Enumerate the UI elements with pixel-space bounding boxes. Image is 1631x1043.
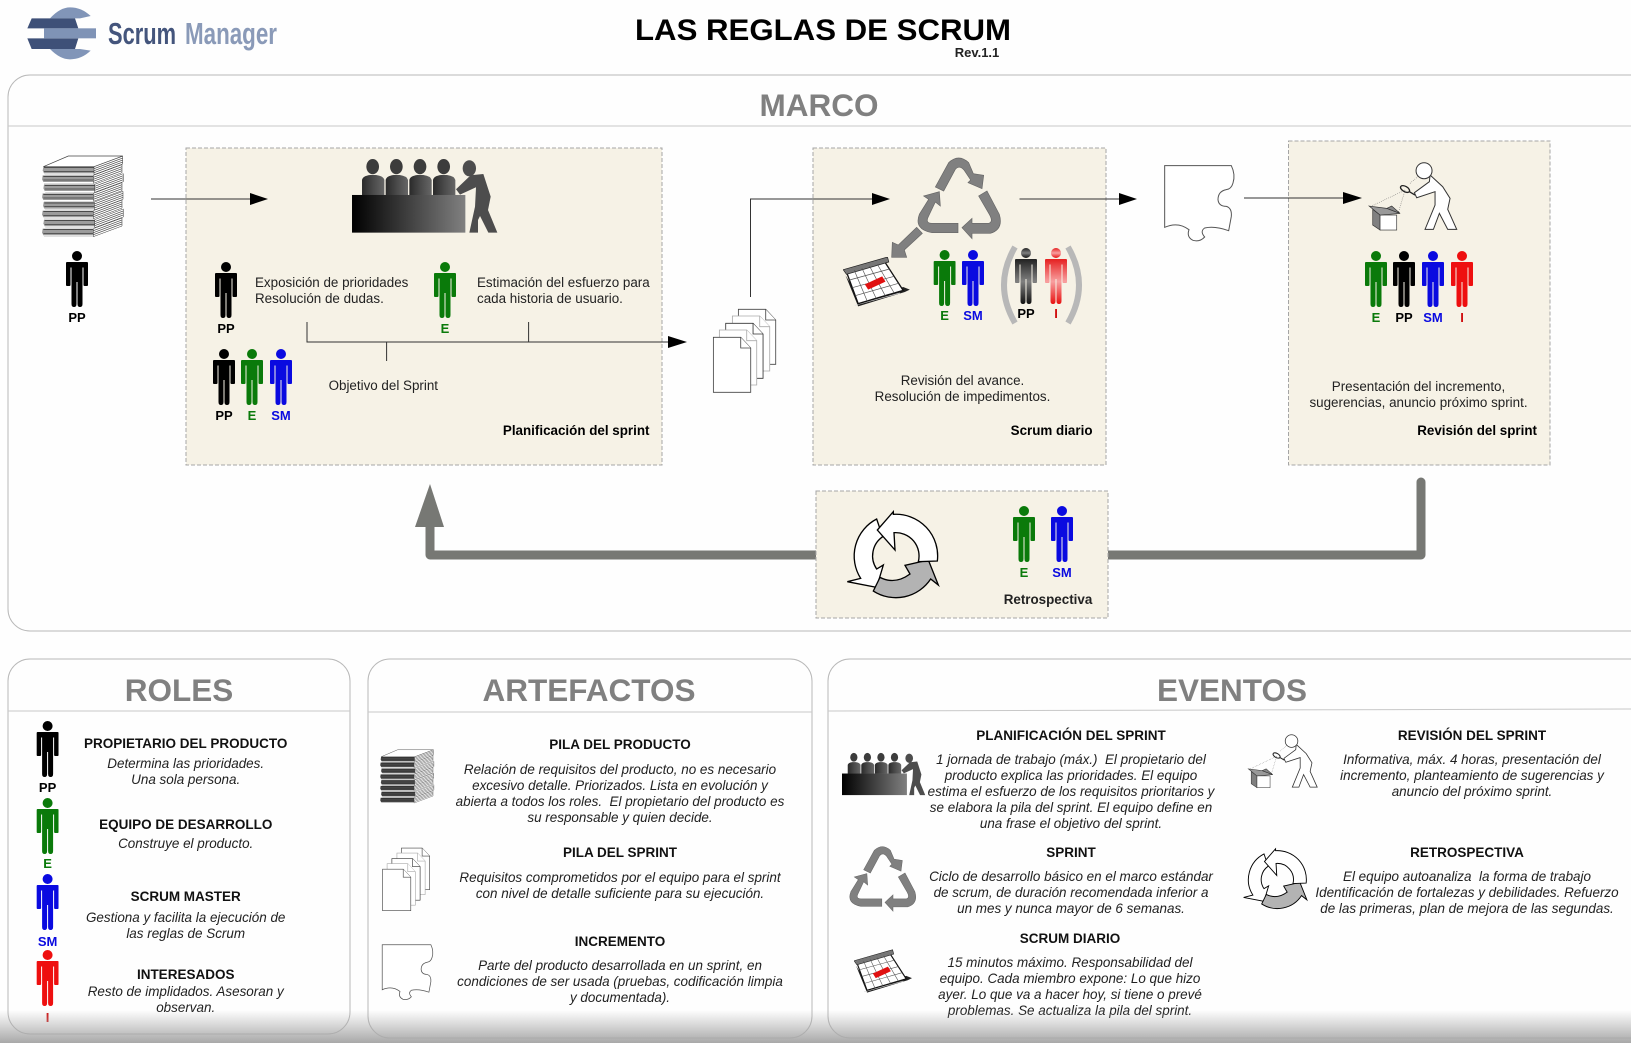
arrow: scrum diario a incremento — [1020, 193, 1137, 205]
icon: sprint backlog docs — [713, 309, 776, 392]
person: SM: SM — [1423, 310, 1443, 325]
person group: optional PP and I in parentheses: I — [1054, 306, 1058, 321]
text: estimación: Estimación del esfuerzo para — [477, 275, 650, 290]
heading: artefactos: ARTEFACTOS — [483, 672, 695, 708]
person: I — [1451, 251, 1473, 325]
caption: planificación: Planificación del sprint — [503, 423, 650, 438]
event: retrospectiva: RETROSPECTIVA — [1410, 845, 1524, 860]
event: revisión: incremento, planteamiento de sugerencias y — [1340, 768, 1605, 783]
artefact: pila del producto: PILA DEL PRODUCTO — [549, 737, 691, 752]
artefact: incremento — [382, 934, 783, 1005]
event: retrospectiva: Identificación de fortalezas y debilidades. Refuerzo — [1315, 885, 1619, 900]
role: interesados: I — [46, 1010, 49, 1025]
box: revisión del sprint — [1288, 141, 1550, 465]
arrow: incremento a revisión — [1244, 192, 1362, 204]
text: presentación: sugerencias, anuncio próximo sprint. — [1309, 395, 1528, 410]
role: propietario: PP — [39, 780, 57, 795]
person: SM: SM — [963, 308, 983, 323]
person: E estimación: E — [441, 321, 450, 336]
event: revisión: anuncio del próximo sprint. — [1392, 784, 1552, 799]
artefact: pila del sprint: Requisitos comprometidos por el equipo para el sprint — [459, 870, 781, 885]
artefact: incremento: Parte del producto desarrollada en un sprint, en — [478, 958, 762, 973]
artefact: incremento: y documentada). — [569, 990, 670, 1005]
event: retrospectiva — [1244, 845, 1619, 916]
event: retrospectiva: El equipo autoanaliza la forma de trabajo — [1343, 869, 1591, 884]
panel: artefactos — [368, 659, 812, 1038]
event: scrum diario: SCRUM DIARIO — [1020, 931, 1120, 946]
event: scrum diario: 15 minutos máximo. Responsabilidad del — [948, 955, 1192, 970]
event: sprint: Ciclo de desarrollo básico en el marco estándar — [929, 869, 1213, 884]
event: revisión — [1248, 728, 1605, 799]
artefact: pila del producto — [380, 737, 785, 825]
caption: retrospectiva: Retrospectiva — [1004, 592, 1093, 607]
text: exposición: Resolución de dudas. — [255, 291, 384, 306]
artefact: incremento: condiciones de ser usada (pruebas, codificación limpia — [457, 974, 783, 989]
role: interesados: Resto de implidados. Asesoran y — [88, 984, 284, 999]
text: objetivo del sprint: Objetivo del Sprint — [329, 378, 438, 393]
role: interesados: INTERESADOS — [137, 967, 234, 982]
panel: marco — [8, 75, 1631, 631]
person: E — [1013, 506, 1035, 580]
event: planificación: producto explica las prioridades. El equipo — [944, 768, 1198, 783]
panel: roles — [8, 659, 350, 1034]
artefact: pila del sprint: con nivel de detalle suficiente para su ejecución. — [476, 886, 764, 901]
person: E objetivo: E — [248, 408, 257, 423]
person: E: E — [940, 308, 949, 323]
person: E objetivo — [241, 349, 263, 423]
role: scrum master: SM — [38, 934, 57, 949]
role: scrum master — [37, 874, 285, 949]
artefact: pila del producto: su responsable y quien decide. — [527, 810, 713, 825]
artefact: pila del producto: abierta a todos los roles. El propietario del producto es — [456, 794, 785, 809]
artefact: pila del producto: excesivo detalle. Priorizados. Lista en evolución y — [472, 778, 769, 793]
event: sprint — [850, 845, 1213, 916]
event: sprint: SPRINT — [1046, 845, 1097, 860]
role: scrum master: Gestiona y facilita la ejecución de — [86, 910, 285, 925]
person: I: I — [1460, 310, 1464, 325]
icon: calendar — [843, 257, 910, 306]
role: scrum master: SCRUM MASTER — [131, 889, 241, 904]
person: E — [934, 250, 956, 323]
person: E estimación — [434, 262, 456, 336]
person group: optional PP and I in parentheses: PP — [1017, 306, 1035, 321]
event: scrum diario: problemas. Se actualiza la pila del sprint. — [947, 1003, 1192, 1018]
role: propietario: PROPIETARIO DEL PRODUCTO — [84, 736, 287, 751]
event: retrospectiva: de las primeras, plan de mejora de las segundas. — [1320, 901, 1614, 916]
person: E: E — [1020, 565, 1029, 580]
event: sprint: un mes y nunca mayor de 6 semanas. — [957, 901, 1185, 916]
icon: recycle — [918, 158, 1000, 239]
icon: increment puzzle — [1165, 166, 1234, 241]
person: PP objetivo: PP — [215, 408, 233, 423]
role: equipo: Construye el producto. — [118, 836, 253, 851]
icon: retrospective cycle — [847, 512, 938, 598]
person: PP — [66, 251, 88, 325]
person: E — [1365, 251, 1387, 325]
artefact: incremento: INCREMENTO — [575, 934, 665, 949]
person: SM: SM — [1052, 565, 1072, 580]
arrow: feedback loop — [415, 482, 1421, 555]
text: estimación: cada historia de usuario. — [477, 291, 623, 306]
person: PP: PP — [68, 310, 86, 325]
text: revisión del avance: Revisión del avance. — [901, 373, 1024, 388]
event: scrum diario — [854, 931, 1202, 1018]
role: equipo — [37, 798, 272, 871]
arrow: to calendar — [892, 227, 922, 257]
box: scrum diario — [813, 148, 1106, 465]
person: SM — [1051, 506, 1073, 580]
heading: marco: MARCO — [760, 87, 878, 123]
role: propietario: Una sola persona. — [131, 772, 240, 787]
artefact: pila del sprint — [383, 845, 782, 911]
caption: scrum diario: Scrum diario — [1011, 423, 1092, 438]
revision note: Rev.1.1 — [955, 45, 999, 60]
logo: Scrum Manager — [27, 7, 277, 59]
icon: product backlog stack — [42, 156, 123, 237]
role: equipo: EQUIPO DE DESARROLLO — [99, 817, 272, 832]
role: propietario: Determina las prioridades. — [107, 756, 264, 771]
person: PP — [1393, 251, 1415, 325]
person: PP: PP — [1395, 310, 1413, 325]
role: interesados — [37, 950, 285, 1025]
event: scrum diario: equipo. Cada miembro expone: Lo que hizo — [940, 971, 1201, 986]
caption: revisión: Revisión del sprint — [1417, 423, 1538, 438]
logo text: Scrum — [108, 16, 176, 51]
heading: roles: ROLES — [125, 672, 233, 708]
icon: meeting — [352, 159, 497, 233]
heading: eventos: EVENTOS — [1157, 672, 1307, 708]
event: sprint: de scrum, de duración recomendada inferior a — [934, 885, 1209, 900]
person: PP objetivo — [213, 349, 235, 423]
artefact: pila del sprint: PILA DEL SPRINT — [563, 845, 678, 860]
person: SM — [1422, 251, 1444, 325]
event: planificación: una frase el objetivo del sprint. — [980, 816, 1162, 831]
arrow: planificación a pila sprint — [307, 322, 687, 361]
event: planificación: 1 jornada de trabajo (máx.) El propietario del — [936, 752, 1206, 767]
person: PP exposición — [215, 262, 237, 336]
event: scrum diario: ayer. Lo que va a hacer hoy, si tiene o prevé — [938, 987, 1202, 1002]
panel: eventos — [828, 659, 1631, 1038]
event: planificación: se elabora la pila del sprint. El equipo define en — [930, 800, 1212, 815]
event: revisión: REVISIÓN DEL SPRINT — [1398, 728, 1547, 743]
role: propietario — [37, 721, 287, 795]
logo icon — [27, 7, 96, 59]
box: retrospectiva — [816, 491, 1108, 618]
person: SM objetivo — [270, 349, 292, 423]
person group: optional PP and I in parentheses — [1004, 247, 1079, 323]
person: PP exposición: PP — [217, 321, 235, 336]
event: revisión: Informativa, máx. 4 horas, presentación del — [1343, 752, 1601, 767]
text: presentación: Presentación del incremento, — [1332, 379, 1505, 394]
arrow: pila sprint a scrum diario — [750, 193, 890, 297]
event: planificación: estima el esfuerzo de los requisitos prioritarios y — [928, 784, 1216, 799]
person: SM objetivo: SM — [271, 408, 291, 423]
event: planificación: PLANIFICACIÓN DEL SPRINT — [976, 728, 1167, 743]
role: scrum master: las reglas de Scrum — [126, 926, 245, 941]
role: interesados: observan. — [156, 1000, 215, 1015]
role: equipo: E — [43, 856, 52, 871]
arrow: pila a planificación — [151, 193, 268, 205]
artefact: pila del producto: Relación de requisitos del producto, no es necesario — [464, 762, 776, 777]
person: SM — [962, 250, 984, 323]
text: exposición: Exposición de prioridades — [255, 275, 408, 290]
icon: reviewer — [1369, 163, 1457, 230]
person: E: E — [1372, 310, 1381, 325]
text: revisión del avance: Resolución de impedimentos. — [875, 389, 1050, 404]
box: planificación del sprint — [186, 148, 662, 465]
logo: Scrum Manager: Manager — [185, 16, 277, 51]
title: LAS REGLAS DE SCRUM — [635, 14, 1011, 47]
event: planificación — [842, 728, 1216, 831]
